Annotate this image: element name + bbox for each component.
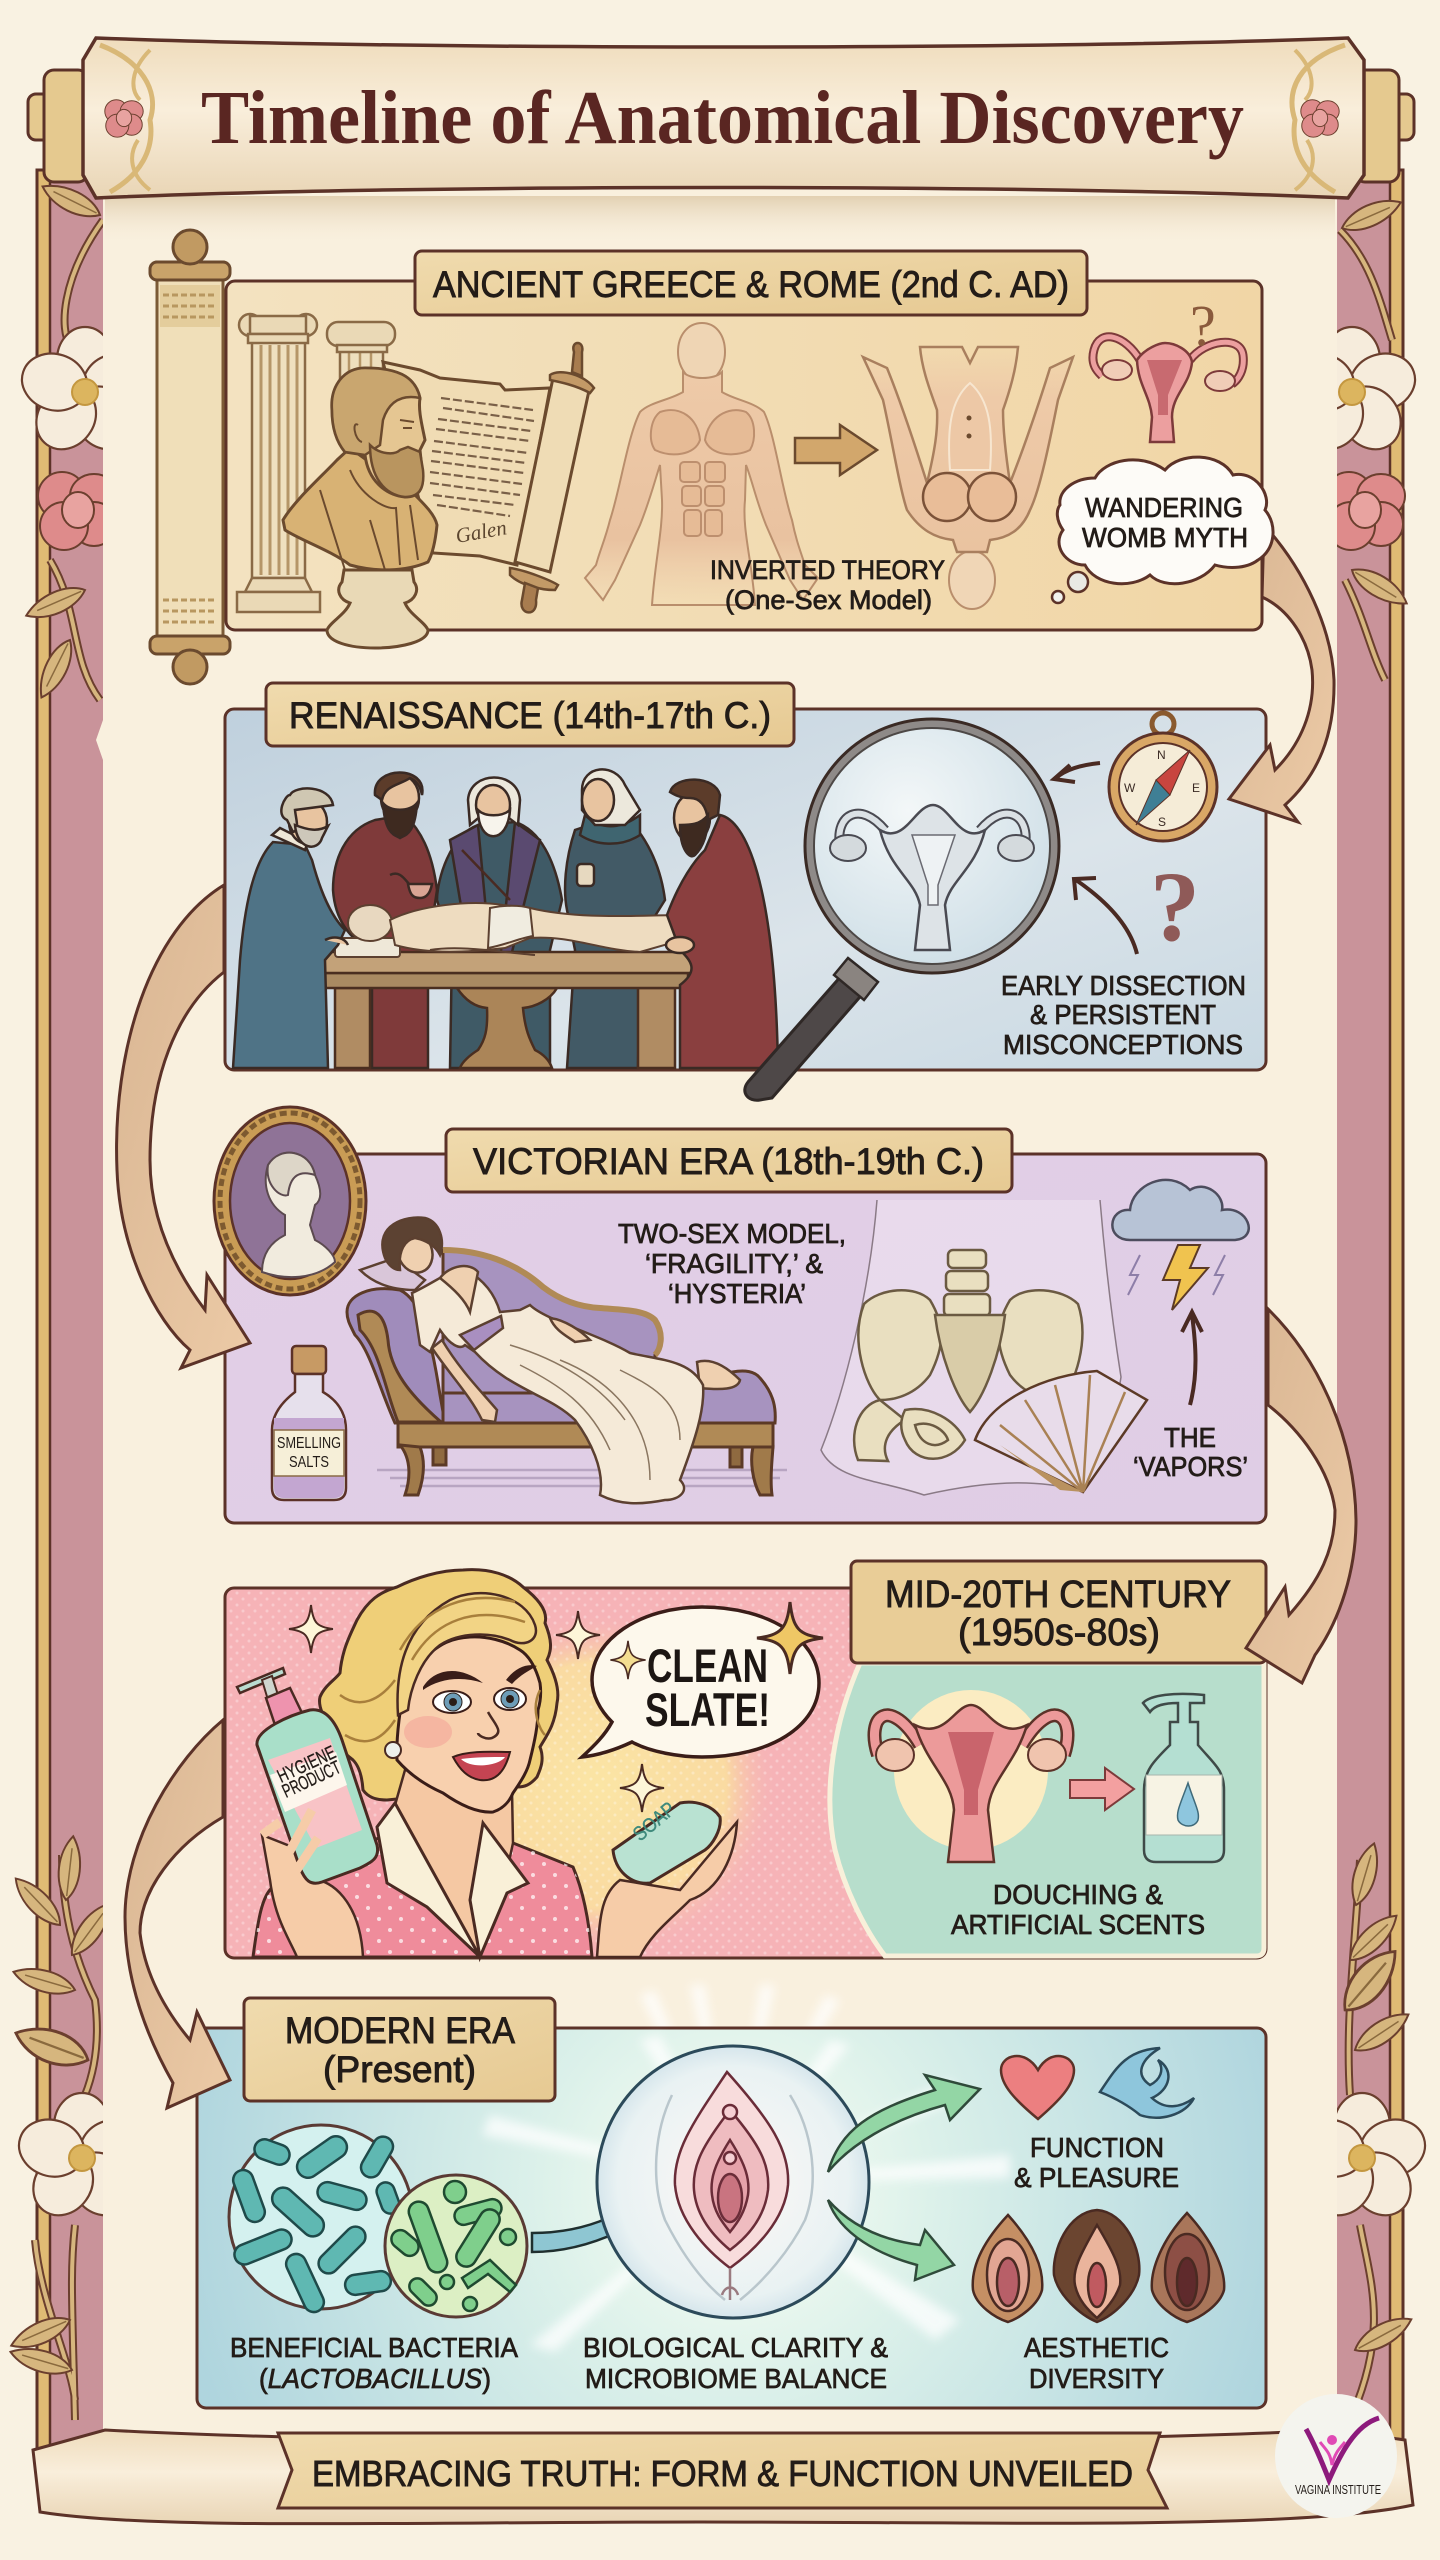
aesthetic diversity shapes [973,2210,1224,2322]
misconceptions label: & PERSISTENT [1030,999,1216,1030]
panel 4 title plate [851,1561,1266,1663]
face [397,1637,541,1812]
muscle detail [651,410,754,536]
uterus icon with question mark: ? [1190,293,1216,358]
aesthetic diversity label: DIVERSITY [1029,2363,1164,2394]
front physician left [233,788,348,1068]
bottom banner: EMBRACING TRUTH: FORM & FUNCTION UNVEILED [312,2453,1133,2494]
front hair [398,1593,536,1715]
douching label: DOUCHING & [993,1879,1163,1910]
vapors label: THE [1164,1422,1216,1453]
function and pleasure label [1014,2132,1179,2193]
pelvic bones [854,1250,1082,1461]
green bacteria circle [385,2175,527,2317]
misconceptions label: EARLY DISSECTION [1001,970,1246,1001]
smelling salts bottle: SMELLING [277,1435,341,1452]
compass: E [1192,781,1200,795]
smelling salts bottle [272,1346,346,1500]
douching label [951,1879,1205,1940]
panel 2 title plate [266,683,794,746]
hygiene bottle [237,1668,378,1883]
vapors label: ‘VAPORS’ [1133,1451,1248,1482]
speech bubble: CLEAN [647,1639,768,1692]
magnifying glass [745,719,1059,1100]
halftone dots [227,1590,877,1956]
green arrow to function [828,2075,980,2172]
vines and flowers: upper right [1282,194,1422,680]
chaise back [443,1250,661,1400]
panel 1 title plate [415,251,1087,315]
uterus in lens [830,805,1034,950]
inverted theory label [710,555,945,615]
inverted theory label: INVERTED THEORY [710,555,945,585]
woman with hygiene products [237,1570,737,1957]
pearl earring [385,1742,401,1758]
scroll corner ornament left [100,45,153,192]
ionic columns [237,314,395,612]
hair strands [340,1598,545,1741]
bust of galen [283,368,437,648]
hair back [319,1570,558,1800]
chaise legs [400,1445,773,1495]
hair [382,1217,442,1270]
douching label: ARTIFICIAL SCENTS [951,1909,1205,1940]
panel 3 title plate: VICTORIAN ERA (18th-19th C.) [473,1141,984,1182]
small arrow from compass [1054,763,1100,782]
panel 4 title plate: MID-20TH CENTURY [885,1574,1231,1616]
open manuscript [383,343,594,612]
hygiene bottle: PRODUCT [279,1757,345,1803]
curved arrow to lens [1074,878,1137,954]
hygiene bottle: HYGIENE [274,1742,339,1788]
transition arrow [795,425,877,475]
open manuscript: Galen [454,515,508,548]
connector arrow: mid-century to modern [125,1720,230,2108]
light rays [482,2035,1010,2352]
compass: S [1158,815,1166,829]
floor shadow [377,1470,787,1486]
shape 3 [1152,2213,1224,2322]
chaise lounge [347,1250,775,1495]
rear column [327,322,395,385]
compass [1109,713,1217,841]
panel 1: ancient greece and rome [150,230,1262,684]
logo badge: vagina institute: VAGINA INSTITUTE [1295,2482,1381,2497]
wandering womb thought bubble: WOMB MYTH [1082,522,1248,553]
male anatomy figure [585,323,818,605]
collar [377,1803,528,1957]
scroll left rolls [28,70,88,182]
pink arrow [1070,1768,1134,1810]
left forearm [262,1835,363,1957]
storm cloud and lightning [1112,1180,1249,1310]
panel 5 title plate: (Present) [323,2049,476,2090]
pedestal [327,570,428,648]
reclining woman [382,1217,740,1503]
panel 2 title plate: RENAISSANCE (14th-17th C.) [289,695,771,736]
panel background [197,2028,1266,2408]
panel 2: renaissance [225,683,1266,1100]
douche bottle [1143,1694,1224,1862]
neckline [440,1266,478,1312]
shape 1 [973,2215,1042,2322]
dress [412,1268,703,1503]
front physician right [666,780,778,1068]
two-sex model label: ‘FRAGILITY,’ & [645,1248,823,1279]
pink panel background [225,1588,1266,1958]
compass: W [1124,781,1136,795]
panel 3 title plate [446,1129,1012,1192]
heart icon [1001,2056,1074,2119]
arrow up to cloud [1182,1312,1202,1405]
beard [370,445,423,497]
panel 3: victorian era [214,1107,1266,1523]
arm [432,1340,497,1422]
panel 4 title plate: (1950s-80s) [958,1612,1160,1654]
title scroll [28,38,1414,198]
misconceptions label [1001,970,1246,1060]
bottom banner [278,2433,1167,2508]
connector arrow: renaissance to victorian [117,885,250,1368]
vines and flowers: lower right [1292,1841,1432,2420]
physician in maroon [333,772,437,1068]
chaise arm [347,1289,445,1423]
two-sex model label: TWO-SEX MODEL, [618,1218,846,1249]
scroll corner ornament right [1292,45,1345,192]
soap bar: SOAP [629,1798,680,1846]
shape 2 [1054,2210,1139,2322]
central bubble [597,2046,869,2318]
uterus icon with question mark [1093,293,1243,442]
speech bubble [582,1602,823,1757]
head [332,368,425,497]
scroll right rolls [1355,70,1414,182]
soap bar [613,1798,720,1883]
belt [460,1316,503,1350]
panel background [226,281,1262,630]
body on table [335,903,689,957]
logo badge: vagina institute [1275,2394,1397,2518]
physician with white beard [437,778,562,1068]
dress folds [510,1345,680,1480]
aesthetic diversity label [1024,2332,1169,2394]
pillow [360,1258,425,1290]
panel 5: modern era [197,1985,1266,2408]
right hand and arm [597,1822,737,1957]
misconceptions label: MISCONCEPTIONS [1003,1029,1243,1060]
function and pleasure label: & PLEASURE [1014,2162,1179,2193]
dress dots [253,1835,592,1957]
cheek [404,1716,452,1748]
aesthetic diversity label: AESTHETIC [1024,2332,1169,2363]
two-sex model label: ‘HYSTERIA’ [668,1278,806,1309]
pelvis with veil [821,1200,1121,1495]
eyes and brows [423,1665,537,1713]
wandering womb thought bubble [1052,457,1273,603]
panel background [225,1154,1266,1523]
wandering womb thought bubble: WANDERING [1085,492,1243,523]
physician in slate [565,769,665,1068]
chaise rail [398,1423,773,1447]
nose [478,1712,498,1738]
hand on belly [550,1318,590,1342]
sparkles [289,1605,664,1812]
bottom scroll [33,2430,1413,2524]
vines and flowers: upper left [15,176,155,702]
beneficial bacteria label: (LACTOBACILLUS) [259,2363,491,2394]
halftone glow [425,1615,775,1955]
wave icon [1100,2048,1194,2118]
panel 4: mid-20th century [225,1561,1266,1958]
hand fan [975,1371,1147,1492]
veil [821,1200,1121,1495]
biological clarity label [583,2332,888,2394]
dissection table [307,952,702,1068]
beneficial bacteria label: BENEFICIAL BACTERIA [230,2332,518,2363]
beneficial bacteria label [230,2332,518,2394]
vapors label [1133,1422,1248,1482]
panel 1 title plate: ANCIENT GREECE & ROME (2nd C. AD) [433,264,1069,305]
panel 5 title plate [244,1998,555,2101]
connector arrow: victorian to mid-century [1246,1309,1356,1683]
mouth [453,1752,510,1780]
inverted theory label: (One-Sex Model) [725,585,932,615]
feet [697,1361,740,1389]
bacteria circles [229,2125,527,2317]
biological clarity label: BIOLOGICAL CLARITY & [583,2332,888,2363]
two-sex model label [618,1218,846,1309]
blue arrow [532,2210,643,2252]
biological clarity label: MICROBIOME BALANCE [585,2363,887,2394]
function and pleasure label: FUNCTION [1030,2132,1164,2163]
face [392,1226,438,1278]
shoulders [283,448,437,570]
vines and flowers: lower left [7,1835,152,2420]
hair [332,368,420,455]
physicians behind table [333,769,665,1068]
side folds [656,2095,813,2300]
speech bubble: SLATE! [645,1683,770,1736]
scroll body [83,38,1364,198]
central anatomy [675,2072,788,2300]
ear and eye [355,420,414,442]
smelling salts bottle: SALTS [289,1454,329,1471]
rolled scroll column [150,230,230,684]
title: Timeline of Anatomical Discovery [201,76,1244,160]
inverted anatomy figure [863,347,1073,609]
green arrow to diversity [828,2200,954,2280]
parchment sheet [96,180,1337,2440]
panel background [225,709,1266,1070]
teal lactobacillus circle [229,2125,413,2315]
light rays above panel [640,1985,840,2182]
fingers [262,1810,318,1880]
connector arrow: ancient to renaissance [1229,525,1334,822]
question mark: ? [1150,851,1200,962]
neck [395,1770,513,1957]
front column [237,314,320,612]
green section [830,1663,1264,1956]
parchment shading [105,196,1335,246]
panel 5 title plate: MODERN ERA [285,2010,515,2051]
pink uterus [874,1705,1068,1862]
dress [253,1835,592,1957]
cameo portrait [214,1107,366,1295]
compass: N [1157,748,1166,762]
chaise seat [443,1371,775,1423]
